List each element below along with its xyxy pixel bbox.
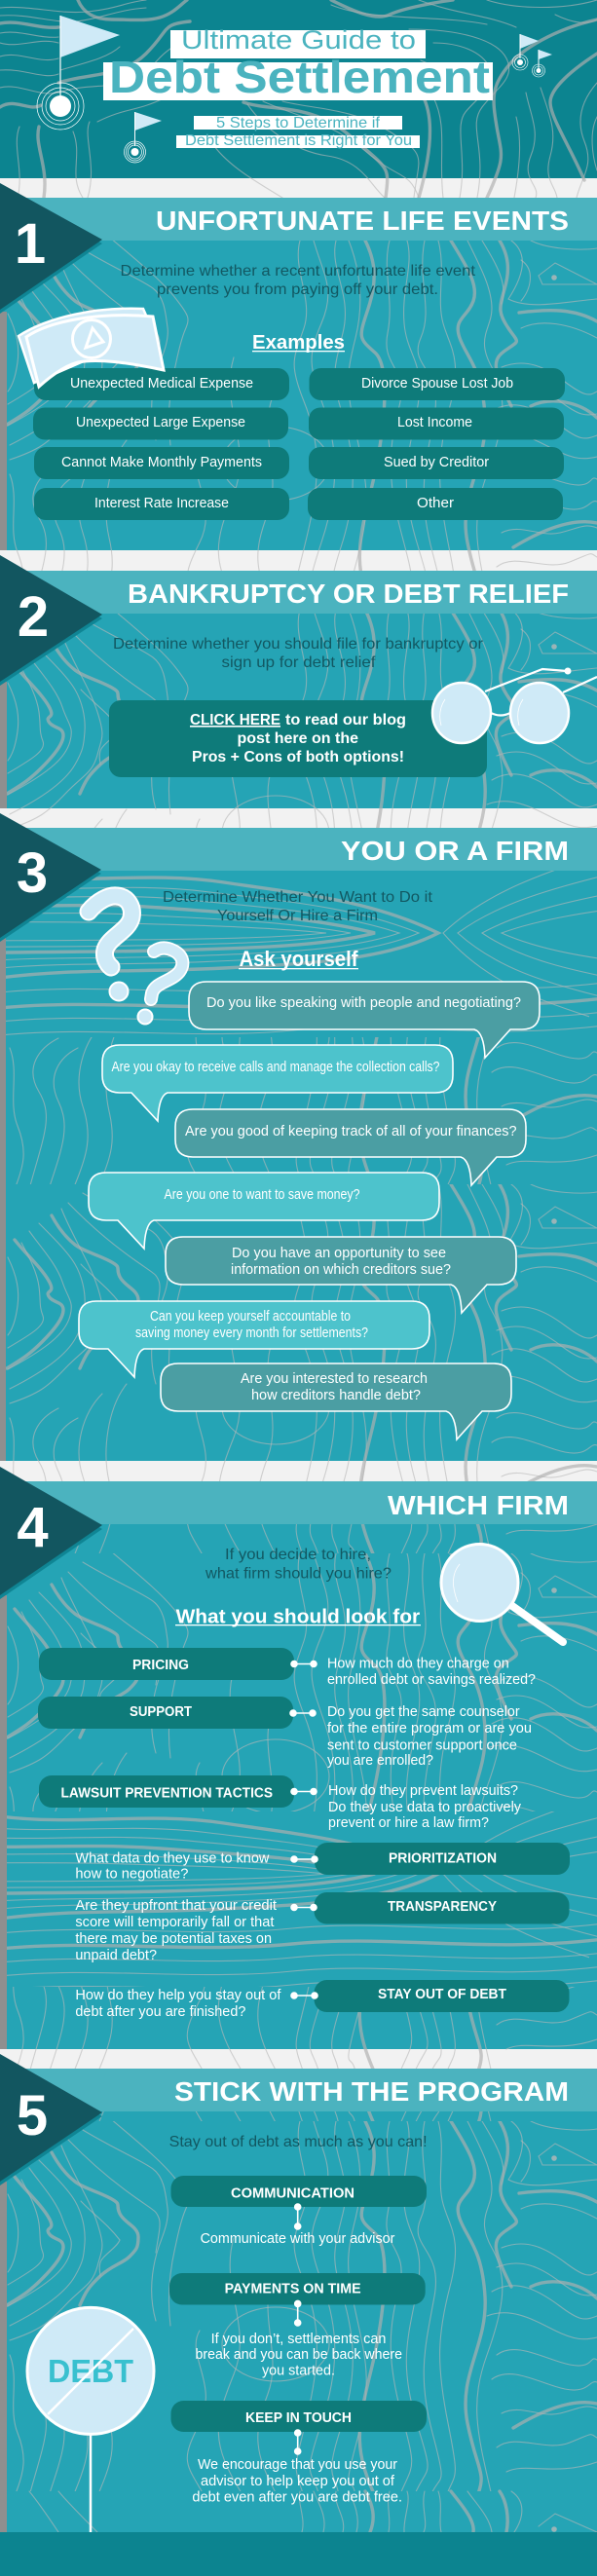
footer band (0, 2532, 597, 2576)
row: support (38, 1697, 532, 1769)
description: If you decide to hire, (225, 1547, 371, 1563)
row: prioritization (75, 1843, 570, 1883)
row: pricing (39, 1648, 536, 1688)
ask yourself heading: Ask yourself (240, 947, 358, 971)
speech bubble: information on which creditors sue? (231, 1262, 451, 1278)
row: transparency (75, 1892, 570, 1963)
number badge: 4 (17, 1496, 49, 1559)
row: pricing: enrolled debt or savings realized? (327, 1672, 536, 1688)
step: keep in touch: debt even after you are debt free. (192, 2490, 402, 2506)
heading bar: STICK WITH THE PROGRAM (174, 2076, 569, 2107)
button labels: Lost Income (397, 415, 472, 430)
step: keep in touch: advisor to help keep you out of (201, 2474, 395, 2489)
icon: glasses (432, 668, 597, 743)
number badge: 5 (17, 2084, 48, 2147)
number badge (0, 183, 102, 314)
heading bar (0, 1481, 597, 1524)
row: lawsuit prevention (39, 1775, 522, 1831)
speech bubble: Are you interested to research (241, 1371, 428, 1387)
number badge: 1 (15, 212, 46, 276)
heading bar: UNFORTUNATE LIFE EVENTS (156, 205, 569, 236)
icon: question marks (89, 896, 182, 1025)
speech bubble: Are you one to want to save money? (164, 1187, 360, 1203)
callout: blog link: CLICK HERE (190, 712, 280, 728)
callout: blog link: to read our blog (285, 712, 406, 728)
speech bubble: saving money every month for settlements? (135, 1325, 368, 1341)
number badge (0, 813, 101, 942)
row: transparency: TRANSPARENCY (388, 1899, 497, 1915)
speech bubble: Can you keep yourself accountable to (150, 1309, 351, 1325)
heading bar (0, 828, 597, 871)
row: transparency: Are they upfront that your credit (75, 1898, 277, 1914)
panel: step 4 (0, 1467, 597, 2020)
speech bubble: Do you like speaking with people and negotiating? (206, 995, 521, 1011)
callout: blog link: post here on the (238, 730, 358, 747)
speech bubble (166, 1237, 516, 1313)
step: payments on time: you started. (262, 2364, 335, 2379)
what to look for heading: What you should look for (176, 1605, 420, 1628)
button labels: Other (417, 496, 454, 511)
row: transparency: unpaid debt? (75, 1948, 157, 1963)
step: payments on time: break and you can be back where (195, 2347, 402, 2363)
subtitle: 5 Steps to Determine if (216, 115, 381, 131)
panel: step 2 (0, 555, 597, 777)
speech bubble (89, 1173, 439, 1249)
speech bubble (189, 982, 540, 1058)
step: payments on time (169, 2273, 426, 2379)
speech bubble (102, 1045, 453, 1121)
button labels: Interest Rate Increase (94, 496, 229, 511)
button labels: Unexpected Large Expense (76, 415, 245, 430)
subtitle (176, 115, 420, 149)
number badge: 3 (17, 841, 48, 905)
icon: right flag (512, 34, 539, 70)
icon: far right flag (532, 50, 552, 77)
description (113, 636, 484, 671)
subtitle: Debt Settlement is Right for You (185, 132, 412, 149)
description: what firm should you hire? (205, 1566, 392, 1582)
step: communication: COMMUNICATION (231, 2185, 354, 2201)
button labels: Cannot Make Monthly Payments (61, 455, 262, 470)
row: stay out of debt: How do they help you stay out of (75, 1988, 281, 2003)
row: pricing: How much do they charge on (327, 1656, 509, 1671)
icon: magnifying glass (441, 1545, 563, 1642)
speech bubble: Are you okay to receive calls and manage the collection calls? (111, 1060, 440, 1075)
description (205, 1547, 392, 1582)
description (121, 263, 476, 298)
callout: blog link (109, 700, 487, 777)
callout: blog link: Pros + Cons of both options! (192, 749, 404, 765)
speech bubble: how creditors handle debt? (251, 1388, 421, 1403)
icon: money bills (19, 309, 164, 387)
row: support: sent to customer support once (327, 1738, 517, 1754)
number badge (0, 1467, 102, 1599)
row: lawsuit prevention: How do they prevent lawsuits? (328, 1783, 518, 1799)
row: support: SUPPORT (130, 1704, 192, 1720)
step: keep in touch: We encourage that you use your (198, 2457, 397, 2473)
row: prioritization: What data do they use to know (75, 1850, 270, 1866)
button labels: Unexpected Medical Expense (70, 376, 253, 392)
background: header (0, 0, 597, 178)
row: prioritization: how to negotiate? (75, 1867, 188, 1883)
row: stay out of debt: STAY OUT OF DEBT (378, 1987, 506, 2002)
description: prevents you from paying off your debt. (157, 281, 438, 298)
speech bubble (175, 1109, 526, 1185)
examples heading: Examples (252, 332, 345, 354)
step: communication: Communicate with your advisor (201, 2231, 395, 2247)
row: stay out of debt: debt after you are finished? (75, 2004, 245, 2020)
row: pricing: PRICING (132, 1658, 189, 1673)
row: support: for the entire program or are you (327, 1721, 532, 1736)
panel: step 3 (0, 813, 597, 1439)
number badge: 2 (18, 585, 49, 649)
icon: no debt sign (27, 2307, 154, 2532)
panel: step 1 (0, 183, 597, 520)
button labels (61, 376, 513, 511)
step: payments on time: If you don’t, settlements can (211, 2332, 386, 2347)
number badge (0, 555, 102, 686)
row: support: you are enrolled? (327, 1753, 433, 1769)
step: keep in touch: KEEP IN TOUCH (245, 2410, 352, 2426)
icon: small flag (125, 112, 162, 163)
heading bar: BANKRUPTCY OR DEBT RELIEF (128, 579, 569, 609)
step: keep in touch (171, 2401, 427, 2506)
row: prioritization: PRIORITIZATION (389, 1850, 497, 1866)
speech bubble (161, 1363, 511, 1439)
title line 1: Ultimate Guide to (181, 25, 416, 55)
speech bubble: Are you good of keeping track of all of your finances? (185, 1124, 516, 1139)
icon: large flag (37, 16, 120, 130)
row: lawsuit prevention: prevent or hire a law firm? (328, 1815, 489, 1831)
title line 2: Debt Settlement (109, 52, 490, 102)
description: sign up for debt relief (222, 654, 376, 671)
step: payments on time: PAYMENTS ON TIME (225, 2281, 361, 2296)
icon: no debt sign: DEBT (48, 2353, 133, 2389)
step: communication (171, 2176, 427, 2247)
description: Yourself Or Hire a Firm (217, 908, 378, 924)
heading bar: YOU OR A FIRM (341, 836, 569, 866)
description: Stay out of debt as much as you can! (169, 2134, 428, 2150)
speech bubble (79, 1301, 429, 1377)
heading bar (0, 198, 597, 241)
number badge (0, 2054, 102, 2185)
heading bar (0, 571, 597, 614)
description: Determine Whether You Want to Do it (163, 889, 433, 906)
speech bubble: Do you have an opportunity to see (232, 1246, 446, 1261)
row: transparency: score will temporarily fall or that (75, 1915, 274, 1930)
description: Determine whether you should file for bankruptcy or (113, 636, 484, 653)
row: support: Do you get the same counselor (327, 1704, 520, 1720)
buttons: examples (33, 368, 565, 520)
description (163, 889, 433, 924)
row: transparency: there may be potential taxes on (75, 1931, 272, 1947)
description: Determine whether a recent unfortunate life event (121, 263, 476, 280)
button labels: Divorce Spouse Lost Job (361, 376, 513, 392)
row: lawsuit prevention: Do they use data to proactively (328, 1800, 522, 1815)
button labels: Sued by Creditor (384, 455, 489, 470)
panel: step 5 (0, 2054, 597, 2532)
heading bar: WHICH FIRM (388, 1490, 569, 1520)
row: lawsuit prevention: LAWSUIT PREVENTION TACTICS (60, 1786, 273, 1802)
heading bar (0, 2069, 597, 2111)
header (37, 16, 552, 163)
row: stay out of debt (75, 1980, 570, 2020)
